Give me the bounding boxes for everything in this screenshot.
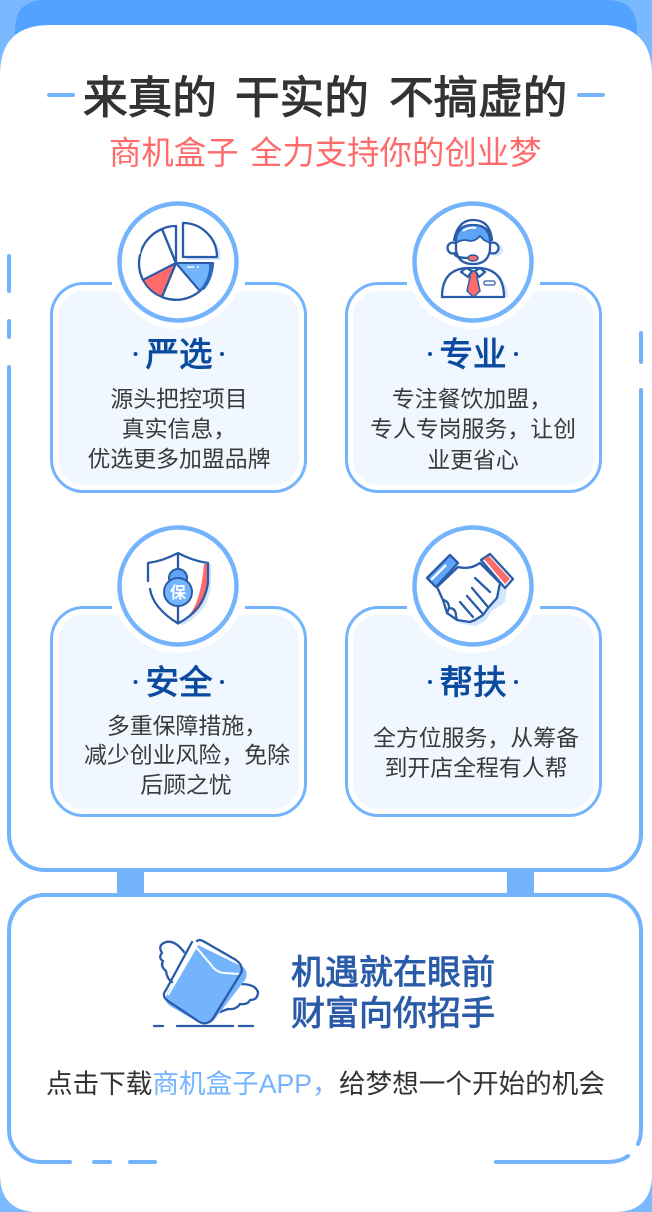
connectors between panels — [117, 870, 534, 895]
text: download prompt: 给梦想一个开始的机会 — [339, 1069, 605, 1099]
panel: call to action — [9, 895, 641, 1162]
text: 严选 description: 真实信息， — [122, 416, 236, 442]
subtitle: 商机盒子 — [109, 135, 239, 171]
text: 帮扶 description: 到开店全程有人帮 — [384, 755, 568, 781]
heading: 帮扶: 帮扶 — [440, 665, 506, 702]
panel: 专业 — [346, 195, 600, 492]
subtitle: 全力支持你的创业梦 — [250, 135, 542, 171]
text: 专业 description: 专人专岗服务，让创 — [370, 416, 576, 442]
title: 干实的 — [235, 74, 369, 123]
icon: winged box — [154, 940, 258, 1026]
title: 来真的 — [83, 74, 217, 123]
text: 严选 description: 源头把控项目 — [110, 386, 248, 412]
text: 专业 description: 专注餐饮加盟， — [392, 386, 552, 412]
panel: 严选 — [52, 195, 306, 492]
panel: 安全 — [52, 519, 306, 816]
panel: 帮扶 — [346, 519, 600, 816]
icon: shield with lock — [120, 528, 236, 644]
text: 安全 description: 减少创业风险，免除 — [84, 742, 290, 768]
heading: call to action: 财富向你招手 — [291, 995, 495, 1033]
text: 帮扶 description: 全方位服务，从筹备 — [373, 725, 579, 751]
heading: 安全: 安全 — [146, 665, 212, 702]
text: 安全 description: 多重保障措施， — [107, 713, 267, 739]
icon: handshake — [414, 528, 532, 644]
text: download prompt: 点击下载商机盒子APP， — [46, 1069, 339, 1099]
heading: 专业: 专业 — [440, 337, 506, 374]
text: 安全 description: 后顾之忧 — [140, 772, 232, 798]
heading: 严选: 严选 — [146, 337, 212, 374]
text: 严选 description: 优选更多加盟品牌 — [87, 446, 271, 472]
text: 专业 description: 业更省心 — [427, 447, 519, 473]
icon: shield with lock: 保 — [170, 584, 186, 602]
title: 不搞虚的 — [389, 74, 567, 123]
icon: customer service agent — [414, 204, 532, 320]
title — [49, 74, 603, 123]
icon: pie chart — [120, 204, 236, 320]
main panel outline — [9, 256, 641, 870]
heading: call to action: 机遇就在眼前 — [291, 954, 495, 992]
